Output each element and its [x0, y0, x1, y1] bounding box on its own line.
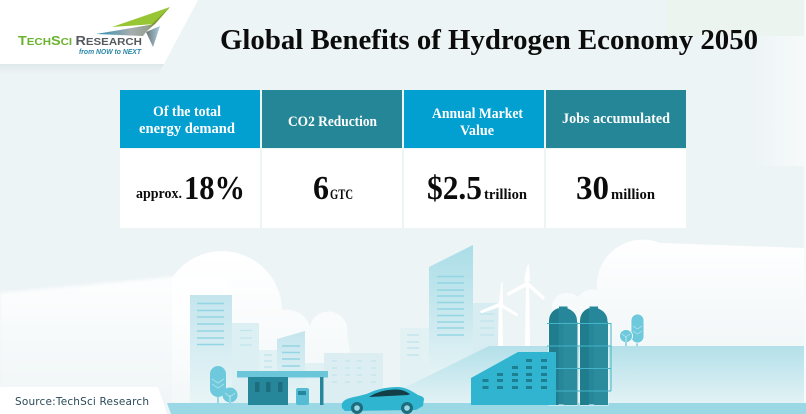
factory building — [471, 352, 556, 405]
ground plane — [167, 346, 806, 414]
column: jobs accumulated: Jobs accumulated — [562, 111, 670, 127]
car — [342, 387, 424, 414]
left trees — [210, 366, 238, 405]
wind turbines — [480, 264, 545, 346]
column: CO2 reduction: GTC — [330, 187, 353, 203]
source label: Source:TechSci Research — [15, 396, 149, 408]
column: jobs accumulated: 30 — [576, 170, 609, 207]
right cloud — [552, 240, 804, 346]
column: annual market value: Value — [460, 123, 495, 139]
column: total energy demand: Of the total — [153, 104, 221, 120]
logo wordmark: TECHSCI RESEARCH — [18, 34, 142, 48]
column: jobs accumulated — [546, 90, 686, 228]
column: CO2 reduction: 6 — [313, 170, 329, 207]
logo mark — [96, 7, 170, 47]
gas station — [237, 371, 328, 405]
left city buildings — [190, 295, 383, 405]
column: total energy demand: 18% — [184, 170, 245, 207]
hydrogen tanks — [547, 306, 611, 405]
column: total energy demand: energy demand — [139, 121, 235, 137]
column: annual market value — [404, 90, 544, 228]
column: annual market value: Annual Market — [432, 106, 523, 122]
column: jobs accumulated: million — [611, 187, 655, 203]
column: CO2 reduction — [262, 90, 402, 228]
logo panel — [0, 0, 198, 74]
left cloud — [0, 251, 360, 410]
table — [120, 90, 686, 228]
column: CO2 reduction: CO2 Reduction — [288, 114, 377, 130]
column: total energy demand: approx. — [136, 186, 182, 202]
right trees — [620, 314, 644, 346]
source label — [0, 387, 167, 414]
logo tagline: from NOW to NEXT — [79, 47, 142, 56]
title: Global Benefits of Hydrogen Economy 2050 — [220, 25, 758, 56]
column: total energy demand — [120, 90, 260, 228]
column: annual market value: trillion — [484, 187, 527, 203]
right city buildings — [400, 245, 498, 398]
column: annual market value: $2.5 — [427, 170, 482, 207]
